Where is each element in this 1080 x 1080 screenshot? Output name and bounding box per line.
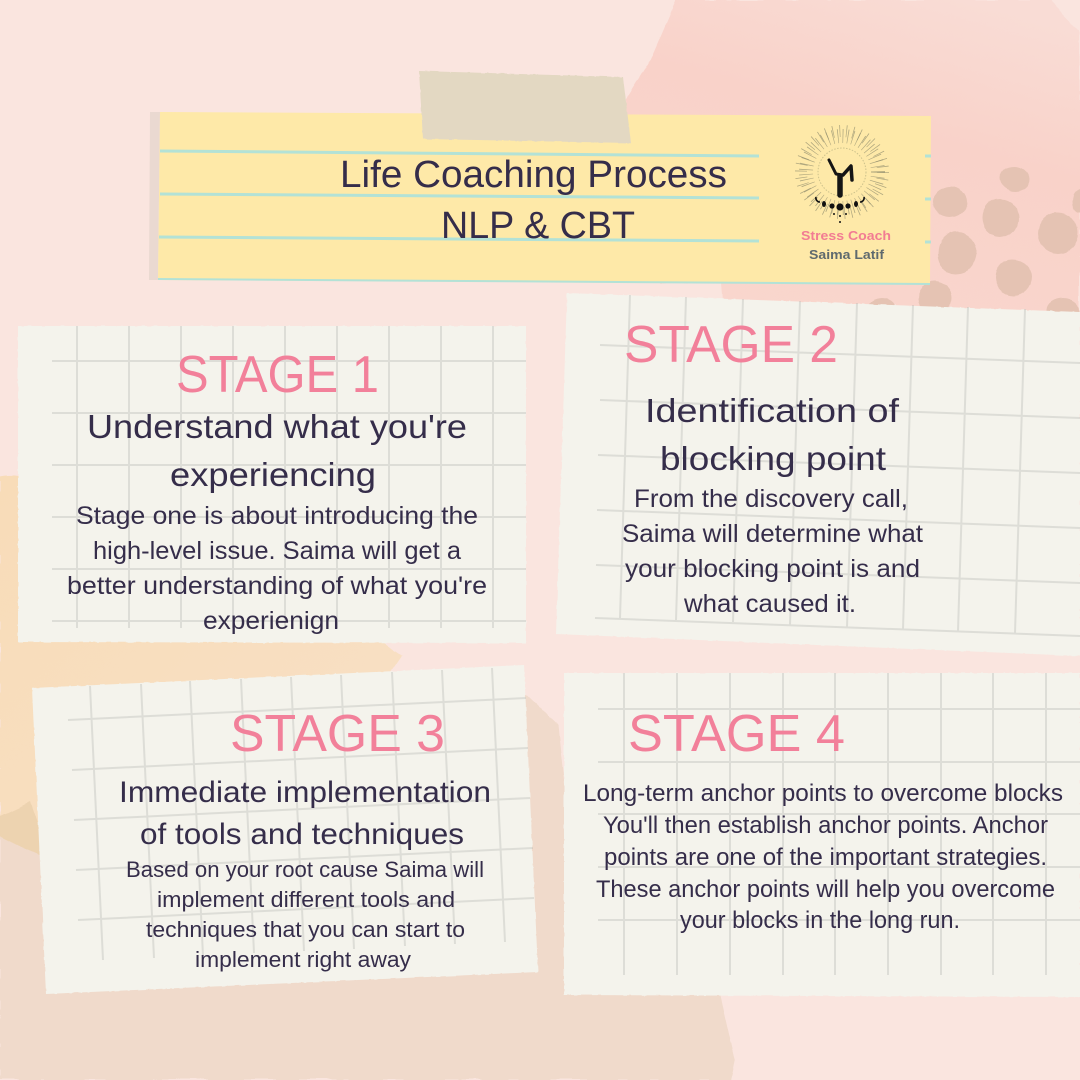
subheading: stage 1: Understand what you're — [87, 408, 467, 445]
subheading: stage 3: of tools and techniques — [140, 818, 464, 851]
body text: stage 1: experienign — [203, 607, 339, 635]
body text: stage 4 — [583, 780, 1063, 934]
body text: stage 4: points are one of the important strategies. — [604, 844, 1047, 871]
body text: stage 4: your blocks in the long run. — [680, 907, 960, 934]
subheading: stage 1 — [87, 408, 467, 493]
body text: stage 1 — [67, 502, 487, 635]
logo text: Stress Coach — [801, 228, 891, 243]
watercolour overlap spot — [0, 801, 40, 855]
body text: stage 3: Based on your root cause Saima will — [126, 857, 484, 882]
title — [340, 154, 727, 247]
watercolour blob: bottom beige — [0, 695, 735, 1080]
subheading: stage 2 — [645, 392, 900, 477]
logo: stress coach — [801, 131, 891, 262]
subheading: stage 1: experiencing — [170, 456, 376, 493]
subheading: stage 3: Immediate implementation — [119, 776, 491, 809]
body text: stage 1: better understanding of what you're — [67, 572, 487, 600]
body text: stage 2: Saima will determine what — [622, 520, 923, 548]
panel: stage 3 — [32, 665, 538, 994]
title: NLP & CBT — [441, 205, 635, 247]
heading: stage 1: STAGE 1 — [176, 346, 379, 404]
subheading: stage 2: Identification of — [645, 392, 900, 429]
body text: stage 3 — [126, 857, 484, 972]
body text: stage 3: implement right away — [195, 947, 411, 972]
heading: stage 2: STAGE 2 — [624, 316, 838, 374]
body text: stage 3: techniques that you can start to — [146, 917, 465, 942]
body text: stage 1: high-level issue. Saima will get a — [93, 537, 461, 565]
watercolour blob: top right pink — [625, 0, 1080, 320]
title: Life Coaching Process — [340, 154, 727, 196]
panel: stage 1 — [18, 326, 526, 643]
body text: stage 2: your blocking point is and — [625, 555, 920, 583]
title note panel — [149, 71, 931, 284]
body text: stage 3: implement different tools and — [157, 887, 455, 912]
decorative dots — [868, 166, 1080, 322]
heading: stage 3: STAGE 3 — [230, 705, 445, 763]
logo text: Saima Latif — [809, 247, 885, 262]
body text: stage 4: These anchor points will help you overcome — [596, 876, 1055, 903]
body text: stage 2 — [622, 485, 923, 618]
body text: stage 4: Long-term anchor points to overcome blocks — [583, 780, 1063, 807]
body text: stage 4: You'll then establish anchor points. Anchor — [603, 812, 1048, 839]
panel: stage 4 — [564, 673, 1080, 997]
body text: stage 1: Stage one is about introducing the — [76, 502, 478, 530]
body text: stage 2: what caused it. — [683, 590, 856, 618]
body text: stage 2: From the discovery call, — [634, 485, 908, 513]
subheading: stage 2: blocking point — [660, 440, 886, 477]
logo text — [801, 228, 891, 262]
watercolour blob: left orange — [0, 475, 402, 850]
panel: stage 2 — [556, 293, 1080, 656]
tape — [419, 71, 631, 143]
subheading: stage 3 — [119, 776, 491, 851]
heading: stage 4: STAGE 4 — [628, 705, 845, 763]
